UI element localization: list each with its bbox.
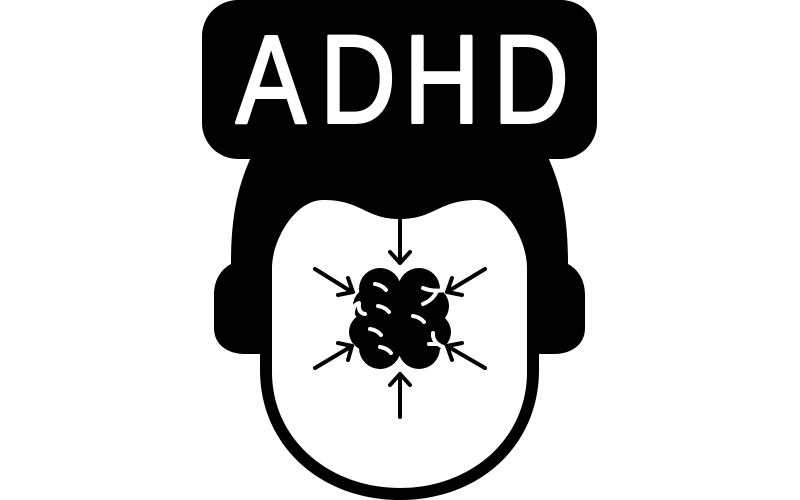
- brain folds: [353, 284, 446, 353]
- arrow: top: [390, 220, 410, 263]
- arrow: bottom: [390, 374, 410, 417]
- brain lobes: [349, 268, 451, 369]
- badge background: [202, 0, 597, 159]
- head silhouette with hair and ears: [214, 155, 585, 500]
- arrow: upper right: [447, 269, 485, 295]
- title badge: [202, 0, 597, 159]
- arrow: upper left: [315, 269, 353, 295]
- arrow: lower right: [447, 343, 485, 368]
- face: [272, 200, 527, 488]
- arrows pointing at brain: [315, 220, 485, 417]
- arrow: lower left: [315, 343, 352, 368]
- brain: [349, 268, 451, 369]
- title: ADHD: ADHD: [236, 11, 569, 150]
